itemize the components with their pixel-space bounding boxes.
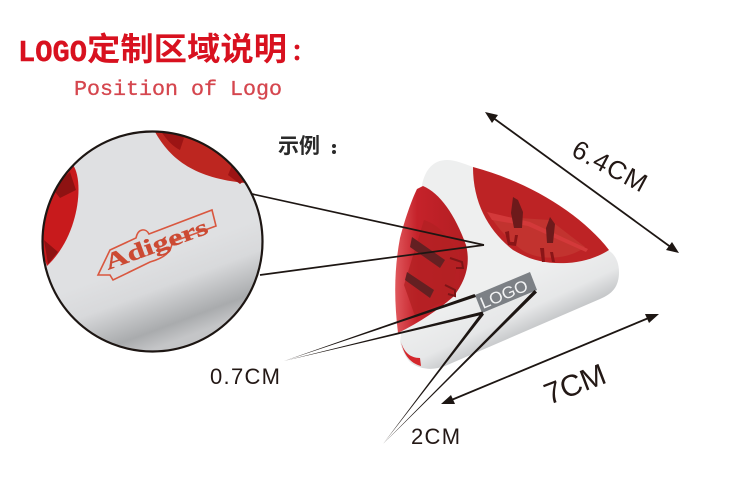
label: 6.4CM: 6.4CM (567, 134, 653, 199)
zoomed red window, left (44, 166, 78, 266)
bottom red tip (401, 342, 421, 366)
label: 7CM: 7CM (540, 358, 611, 412)
subtitle: Position of Logo (74, 77, 282, 102)
title: LOGO customisation area: 定制区域说明 (87, 31, 287, 67)
leader lines: 2CM (383, 290, 537, 444)
printed sample logo (98, 210, 216, 280)
top red window (473, 167, 609, 263)
product illustration (395, 160, 619, 369)
zoomed product surface (40, 130, 265, 355)
logo placement box (475, 272, 537, 313)
infographic canvas (20, 32, 679, 444)
label: 0.7CM: 0.7CM (210, 364, 281, 389)
title: LOGO customisation area: LOGO (18, 36, 87, 71)
callout lines from magnifier to product (252, 194, 484, 275)
dimension arrow: 7CM (441, 314, 659, 404)
zoomed red window, top (156, 132, 244, 183)
product body (400, 160, 619, 369)
printed sample logo: Adigers (101, 214, 211, 275)
magnified detail circle (38, 130, 265, 355)
left red window (395, 186, 468, 333)
title: LOGO customisation area (18, 31, 299, 71)
leader lines: 0.7CM (284, 294, 484, 361)
label: 2CM: 2CM (411, 424, 461, 449)
dimension arrow: 6.4CM (485, 112, 679, 253)
example label: 示例 (278, 135, 320, 158)
logo placement box: LOGO (478, 277, 531, 313)
